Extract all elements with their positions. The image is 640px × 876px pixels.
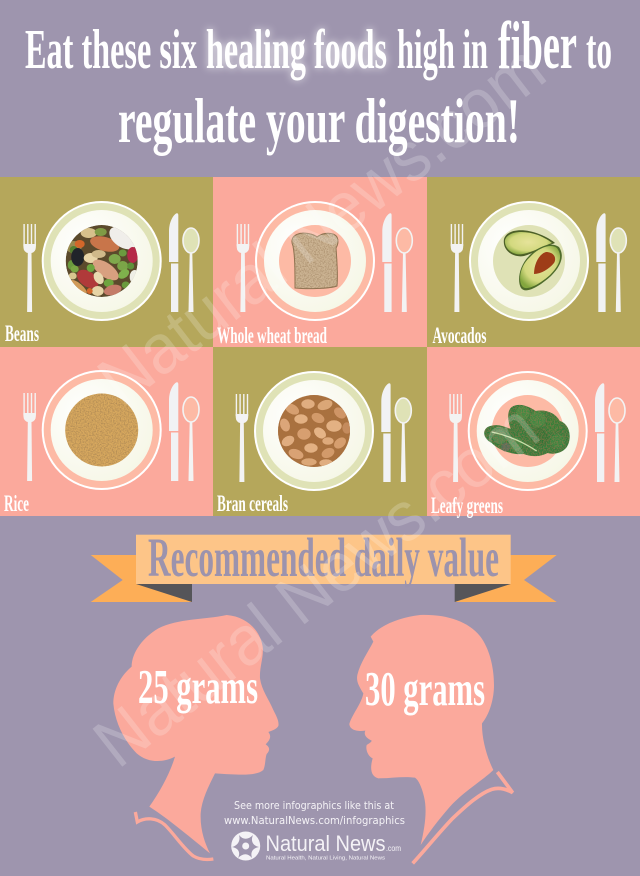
label: bran cereals: Bran cereals: [217, 491, 288, 516]
food: kale: [484, 405, 570, 456]
man collar: [413, 772, 513, 863]
place setting: avocados: [451, 213, 626, 312]
panel: avocados: [427, 177, 640, 348]
food: rice: [65, 394, 138, 466]
food: bran flakes: [278, 395, 352, 467]
logo: Natural News: .com: [386, 843, 401, 853]
male amount: 30 grams: [365, 661, 485, 716]
banner: recommended daily value: [91, 527, 557, 602]
plate: bran cereals: [254, 371, 374, 491]
watermark: lower: Natural News.com: [79, 388, 553, 782]
place setting: leafy greens: [449, 383, 625, 482]
watermark: upper: Natural News.com: [84, 29, 559, 420]
title: healing foods: [206, 19, 387, 81]
panel: whole wheat bread: [213, 177, 427, 348]
place setting: rice: [23, 382, 199, 481]
panel: beans: [0, 177, 213, 347]
place setting: bran cereals: [236, 383, 411, 482]
plate: avocados: [469, 201, 589, 321]
place setting: beans: [23, 213, 199, 312]
panel: bran cereals: [213, 347, 427, 516]
plate: rice: [42, 370, 162, 490]
plate: beans: [42, 201, 162, 321]
icon: globe: [231, 832, 260, 860]
footer call to action: www.NaturalNews.com/infographics: [224, 815, 405, 827]
female amount: 25 grams: [138, 659, 258, 714]
woman collar: [135, 812, 213, 860]
footer call to action: [224, 800, 405, 827]
plate: bread: [255, 201, 375, 321]
logo: Natural News: Natural News: [266, 831, 386, 856]
man silhouette: [349, 615, 513, 863]
title: high in: [397, 19, 488, 81]
title: to: [586, 19, 612, 81]
title: fiber: [498, 7, 577, 83]
plate: leafy greens: [468, 371, 588, 491]
logo: Natural News: [231, 831, 401, 862]
food: avocado halves: [504, 230, 562, 290]
panel: leafy greens: [427, 347, 640, 518]
title: Eat these six: [25, 19, 197, 81]
footer call to action: See more infographics like this at: [234, 800, 394, 812]
food: bread slice: [292, 233, 338, 289]
label: rice: Rice: [4, 491, 29, 516]
woman silhouette: [113, 615, 279, 860]
title: [25, 7, 612, 156]
logo: Natural News: Natural Health, Natural Living, Natural News: [266, 856, 385, 862]
label: whole wheat bread: Whole wheat bread: [217, 323, 327, 348]
panel: rice: [0, 347, 213, 516]
label: avocados: Avocados: [432, 323, 487, 348]
label: beans: Beans: [5, 321, 39, 346]
food: beans: [66, 222, 140, 297]
label: leafy greens: Leafy greens: [431, 493, 503, 518]
place setting: bread: [237, 213, 412, 312]
